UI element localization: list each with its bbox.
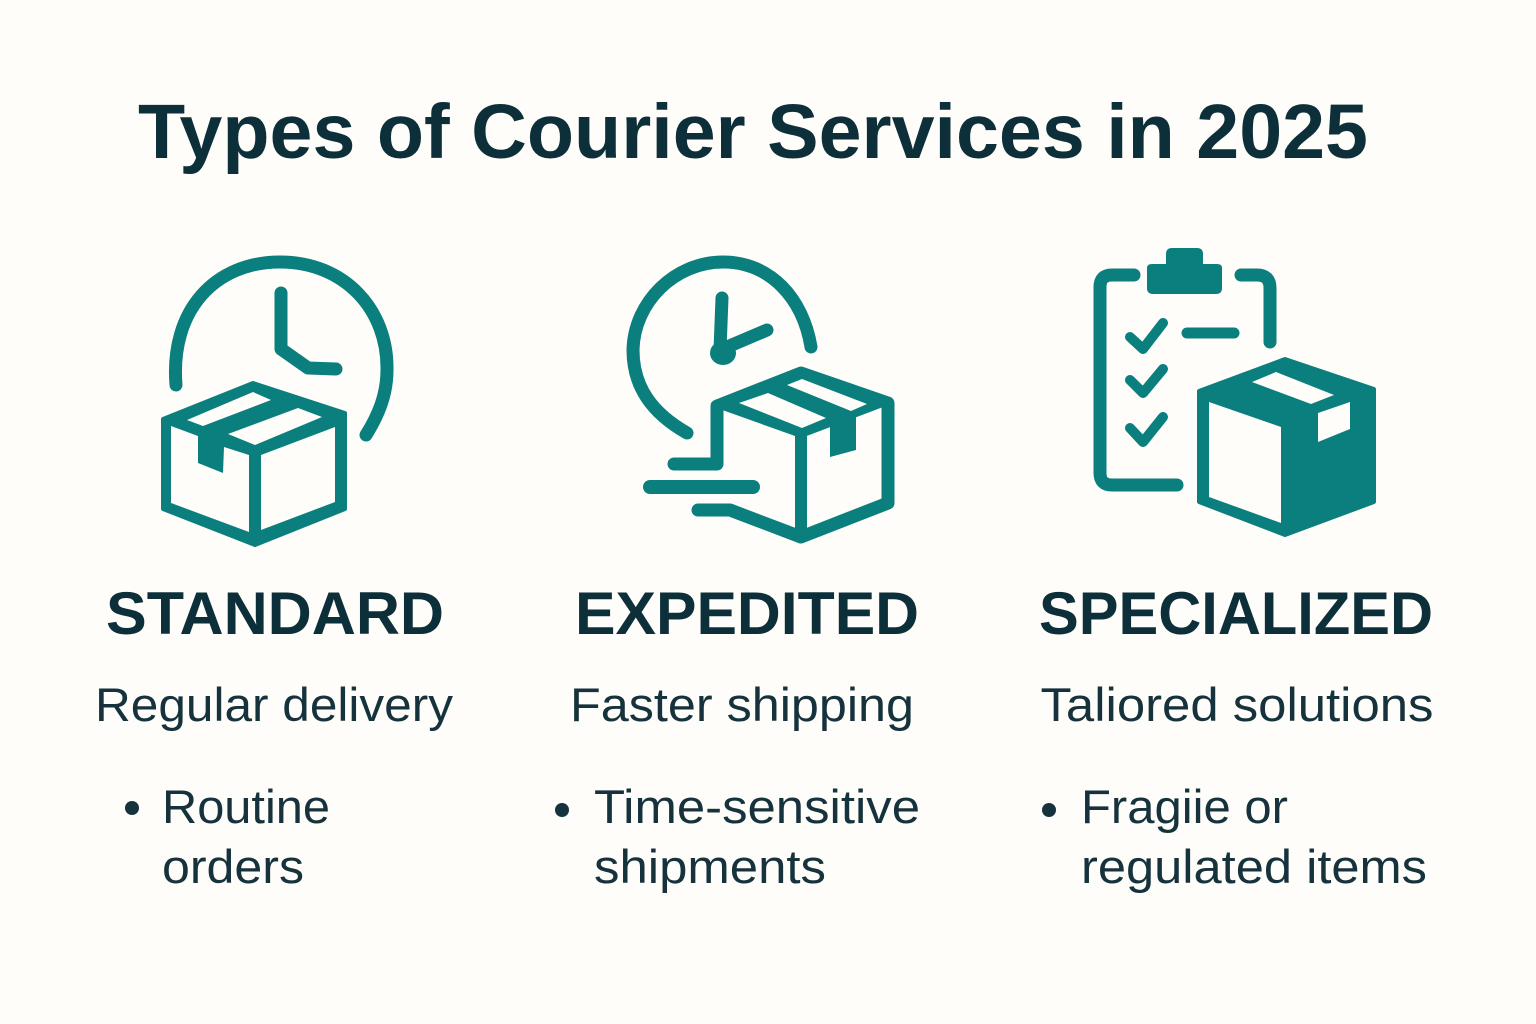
icon: standard clock and box (163, 262, 387, 545)
title: Types of Courier Services in 2025 (138, 89, 1368, 175)
bullet: expedited (555, 780, 920, 893)
clipboard clip (1147, 248, 1222, 294)
subtitle: expedited: Faster shipping (570, 678, 914, 731)
bullet: expedited: shipments (594, 840, 826, 893)
heading: expedited: EXPEDITED (575, 580, 919, 647)
bullet: specialized: Fragiie or (1081, 780, 1288, 833)
subtitle: standard: Regular delivery (95, 678, 454, 731)
checklist (1130, 323, 1163, 442)
clipboard outline (1100, 275, 1270, 485)
bullet: expedited: Time-sensitive (594, 780, 920, 833)
bullet: specialized: regulated items (1081, 840, 1427, 893)
heading: standard: STANDARD (106, 580, 444, 647)
heading: specialized: SPECIALIZED (1039, 580, 1433, 647)
box (1199, 359, 1374, 535)
bullet: standard: orders (162, 840, 304, 893)
bullet: standard (125, 780, 330, 893)
icon: expedited clock and box (633, 262, 888, 537)
bullet: specialized (1042, 780, 1427, 893)
icon: specialized clipboard and box (1100, 248, 1374, 535)
bullet: standard: Routine (162, 780, 330, 833)
subtitle: specialized: Taliored solutions (1040, 678, 1434, 731)
